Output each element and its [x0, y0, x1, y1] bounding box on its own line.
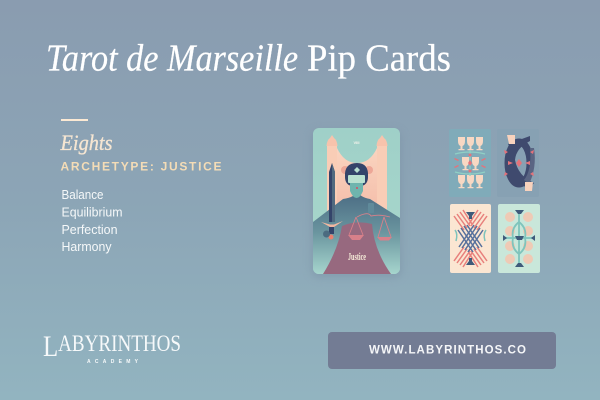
- accent line: [61, 119, 88, 121]
- main card: Justice: [311, 128, 402, 278]
- arch and columns: [326, 135, 388, 212]
- head: [341, 163, 373, 198]
- subheading: archetype: ARCHETYPE: JUSTICE: [60, 160, 222, 174]
- keyword list: [62, 188, 122, 254]
- keyword list: Equilibrium: [62, 206, 122, 220]
- heading: Eights: Eights: [60, 130, 112, 155]
- cups: [458, 137, 483, 188]
- logo: Labyrinthos Academy: ACADEMY: [87, 359, 139, 365]
- small card: eight of swords: [497, 129, 539, 197]
- title: [46, 38, 451, 80]
- keyword list: Balance: [62, 188, 104, 202]
- logo: Labyrinthos Academy: ABYRINTHOS: [58, 331, 181, 356]
- button: website: [328, 332, 556, 369]
- scales: [348, 203, 392, 240]
- title: Pip Cards: [307, 38, 451, 80]
- skirt: [323, 222, 391, 274]
- floor and cloak: [313, 192, 400, 274]
- small card: eight of wands: [450, 204, 491, 273]
- small card: eight of pentacles: [498, 204, 540, 273]
- keyword list: Perfection: [62, 223, 118, 237]
- sword: [321, 163, 343, 240]
- card name: Justice: [348, 252, 366, 263]
- logo: Labyrinthos Academy: [43, 330, 181, 365]
- keyword list: Harmony: [62, 240, 112, 254]
- button: website: WWW.LABYRINTHOS.CO: [369, 344, 526, 356]
- logo: Labyrinthos Academy: L: [43, 330, 58, 363]
- title: Tarot de Marseille: [46, 38, 298, 80]
- card numeral: VIII: [353, 140, 360, 145]
- small card: eight of cups: [449, 129, 491, 197]
